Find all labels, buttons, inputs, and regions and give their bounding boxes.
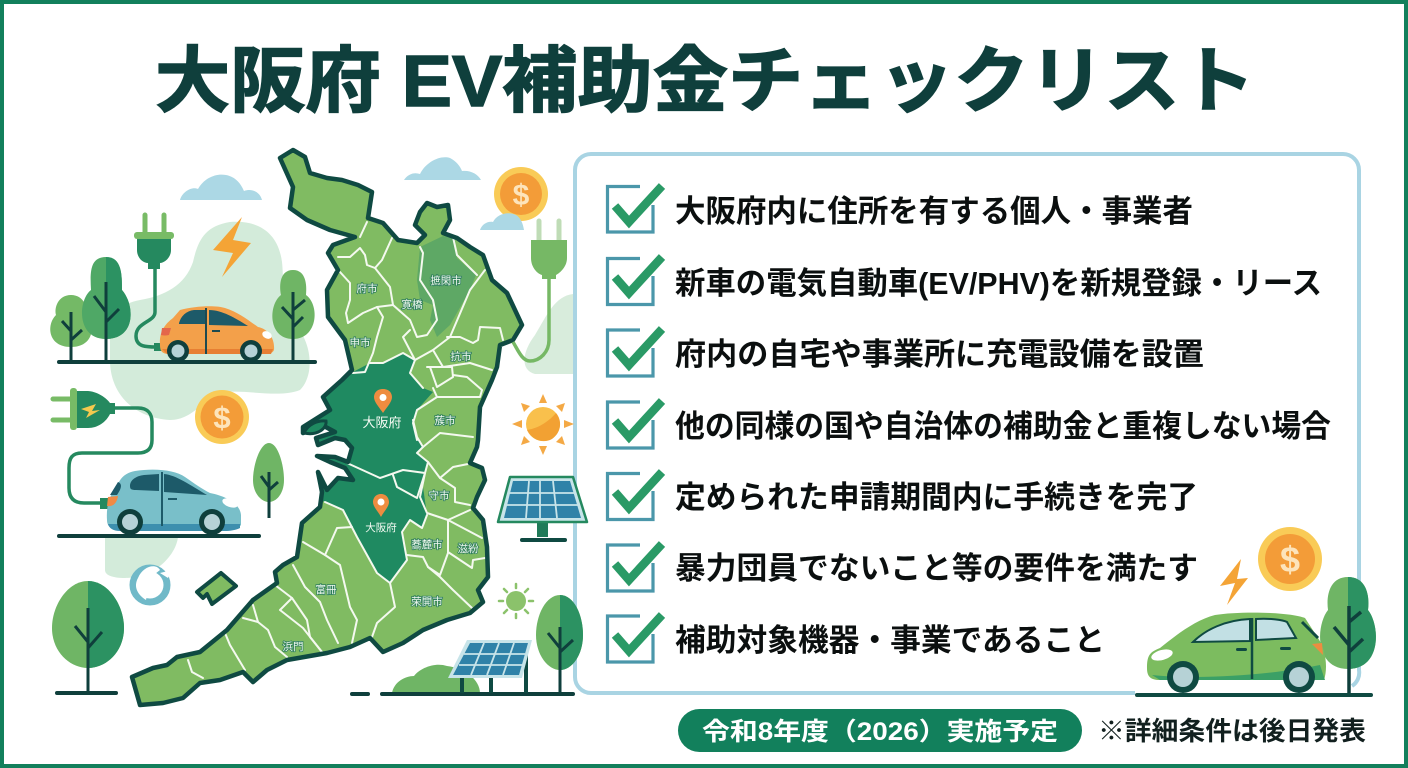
panel: checklist (575, 154, 1359, 693)
illustration: green car corner (1135, 527, 1376, 697)
map pin (373, 494, 389, 517)
tree: large left (82, 257, 131, 362)
ground line (57, 360, 317, 364)
check item 3: 府内の自宅や事業所に充電設備を設置 (675, 337, 1204, 372)
coin: $ (213, 400, 231, 435)
coin (494, 167, 548, 221)
icon: plug upper right (513, 221, 567, 361)
region: central dark green (305, 353, 433, 583)
map label: 抗市 (450, 350, 472, 363)
check item 6: 暴力団員でないこと等の要件を満たす (675, 551, 1198, 586)
prefecture silhouette (132, 150, 522, 705)
check item 1: 大阪府内に住所を有する個人・事業者 (675, 194, 1193, 229)
region: north mid-green (417, 236, 476, 337)
map label: 荣閧市 (411, 595, 443, 608)
map: Osaka prefecture (132, 150, 522, 705)
icon: lightning bolt (213, 217, 251, 277)
map label: 府市 (356, 282, 378, 295)
icon: small green sun (499, 584, 533, 618)
ground line (1135, 693, 1373, 697)
title: 大阪府 EV補助金チェックリスト (155, 42, 1255, 122)
cloud small (480, 213, 524, 230)
check item 4 (608, 401, 1331, 448)
lower blob (105, 537, 178, 578)
map label: 大阪府 upper: 大阪府 (362, 415, 402, 430)
badge: fiscal year (678, 709, 1082, 752)
tree: small left (50, 295, 92, 362)
car: green (1147, 613, 1326, 693)
illustration: centre right scene (350, 157, 587, 696)
check item 1 (608, 186, 1193, 232)
map label: 大阪府 lower: 大阪府 (365, 521, 397, 534)
coin (195, 390, 249, 444)
icon: solar panel lower (448, 640, 532, 693)
check item 7 (608, 615, 1105, 662)
pin dot (378, 498, 384, 506)
coin: $ (1280, 539, 1300, 580)
icon: recycle ring (133, 566, 172, 602)
check item 5: 定められた申請期間内に手続きを完了 (675, 480, 1198, 515)
map label: 滋紛 (458, 542, 479, 555)
panel border (575, 154, 1359, 693)
check item 4: 他の同様の国や自治体の補助金と重複しない場合 (675, 409, 1331, 444)
map label: 蔟市 (434, 414, 456, 427)
tree: bottom left (52, 581, 124, 695)
check item 3 (608, 329, 1204, 376)
tree: bottom centre (536, 595, 583, 694)
map label: 申市 (350, 336, 370, 349)
map label: 寛橋 (402, 298, 423, 311)
small island (197, 573, 236, 604)
map label: 摭閑市 (430, 274, 462, 287)
icon: lightning bolt (1220, 559, 1248, 605)
coin (1258, 527, 1322, 591)
icon: plug lower with cable (53, 388, 152, 509)
map label: 守市 (428, 489, 450, 502)
map label: 蕎麓市 (411, 538, 443, 551)
check item 6 (608, 544, 1198, 591)
coast island (304, 421, 326, 434)
prefecture outline (132, 150, 522, 705)
tree (1320, 577, 1376, 694)
icon: plug upper (134, 215, 174, 351)
map label: 富冊 (316, 583, 337, 596)
car: orange (160, 306, 274, 362)
pin dot (380, 394, 386, 401)
ground line (57, 534, 261, 538)
check item 7: 補助対象機器・事業であること (675, 623, 1105, 658)
map label: 浜門 (282, 641, 304, 653)
tree: small middle (253, 443, 284, 518)
cloud (180, 175, 262, 200)
footnote: ※詳細条件は後日発表 (1098, 716, 1366, 746)
ground line (350, 692, 575, 696)
icon: sun (512, 394, 574, 455)
car: blue (107, 470, 241, 535)
cloud (404, 157, 481, 180)
check item 5 (608, 472, 1198, 520)
check item 2 (608, 257, 1322, 304)
illustration: left EV scene (50, 175, 317, 695)
blob behind plug (524, 294, 573, 374)
municipal boundaries (188, 222, 503, 678)
coin: $ (513, 179, 530, 212)
badge: fiscal year: 令和8年度（2026）実施予定 (702, 718, 1058, 746)
check item 2: 新車の電気自動車(EV/PHV)を新規登録・リース (675, 266, 1322, 301)
map pin (374, 389, 392, 413)
tree: right of orange car (272, 270, 315, 362)
icon: solar panel upper (498, 477, 587, 542)
bush (392, 665, 480, 693)
background blob (110, 222, 310, 420)
